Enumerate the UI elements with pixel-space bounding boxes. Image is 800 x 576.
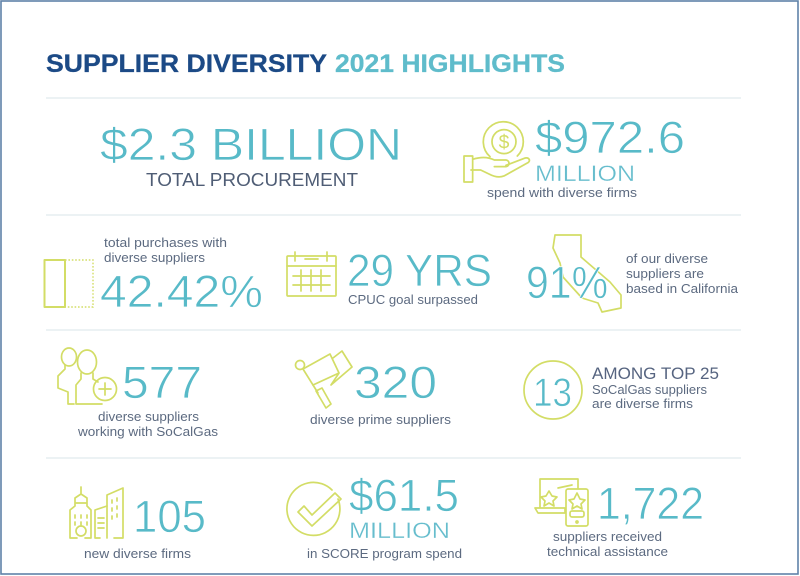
stat: total procurement: TOTAL PROCUREMENT <box>146 170 358 190</box>
stat: total procurement: $2.3 BILLION <box>100 119 402 170</box>
stat: technical assistance: technical assistance <box>547 544 668 559</box>
stat: based in California: of our diverse <box>626 251 708 266</box>
icon: people with plus <box>58 348 116 404</box>
icon: hand holding coin: $ <box>499 133 510 154</box>
icon: flag <box>296 351 352 408</box>
stat: SCORE program spend: $61.5 <box>349 470 459 521</box>
stat: based in California <box>526 251 739 308</box>
stat: based in California: suppliers are <box>626 266 704 281</box>
icon: California outline <box>553 235 621 312</box>
stat: 13 among top 25: are diverse firms <box>592 396 694 411</box>
stat: prime suppliers <box>310 357 452 427</box>
stat: new diverse firms: new diverse firms <box>84 546 192 561</box>
stat: spend with diverse firms: MILLION <box>535 161 635 186</box>
stat: spend with diverse firms <box>487 112 685 200</box>
stat: technical assistance <box>547 478 704 559</box>
stat: diverse suppliers: 577 <box>122 357 202 408</box>
icon: calendar <box>287 252 336 296</box>
stat: based in California: based in California <box>626 281 739 296</box>
stat: total procurement <box>100 119 402 190</box>
stat: 13 among top 25 <box>524 361 719 419</box>
stat: total purchases <box>100 235 263 317</box>
icon: city buildings <box>70 487 123 538</box>
stat: total purchases: 42.42% <box>100 266 263 317</box>
stat: CPUC goal: 29 YRS <box>347 245 492 296</box>
title: SUPPLIER DIVERSITY <box>46 50 327 78</box>
stat: total purchases: total purchases with <box>104 235 227 250</box>
stat: new diverse firms <box>84 491 206 561</box>
stat: diverse suppliers <box>77 357 219 439</box>
stat: SCORE program spend: MILLION <box>349 518 450 543</box>
icon: laptop and phone with stars <box>535 479 588 526</box>
icon: check badge <box>287 482 341 535</box>
stat: prime suppliers: 320 <box>354 357 437 408</box>
stat: 13 among top 25: 13 <box>533 371 572 415</box>
stat: diverse suppliers: diverse suppliers <box>98 409 200 424</box>
title: 2021 HIGHLIGHTS <box>335 50 565 78</box>
stat: SCORE program spend: in SCORE program spend <box>307 546 462 561</box>
stat: new diverse firms: 105 <box>133 491 206 542</box>
stat: spend with diverse firms: $972.6 <box>535 112 685 163</box>
stat: based in California: 91% <box>526 257 608 308</box>
stat: 13 among top 25: SoCalGas suppliers <box>592 382 707 397</box>
title <box>46 50 565 78</box>
stat: technical assistance: 1,722 <box>597 478 704 529</box>
stat: CPUC goal: CPUC goal surpassed <box>348 292 478 307</box>
icon: hand holding coin <box>464 122 529 182</box>
icon: percentage bar <box>44 260 93 307</box>
stat: diverse suppliers: working with SoCalGas <box>77 424 219 439</box>
stat: technical assistance: suppliers received <box>553 529 662 544</box>
stat: prime suppliers: diverse prime suppliers <box>310 412 452 427</box>
stat: 13 among top 25: AMONG TOP 25 <box>592 364 719 383</box>
stat: spend with diverse firms: spend with diverse firms <box>487 185 638 200</box>
stat: SCORE program spend <box>307 470 462 561</box>
stat: total purchases: diverse suppliers <box>104 250 206 265</box>
